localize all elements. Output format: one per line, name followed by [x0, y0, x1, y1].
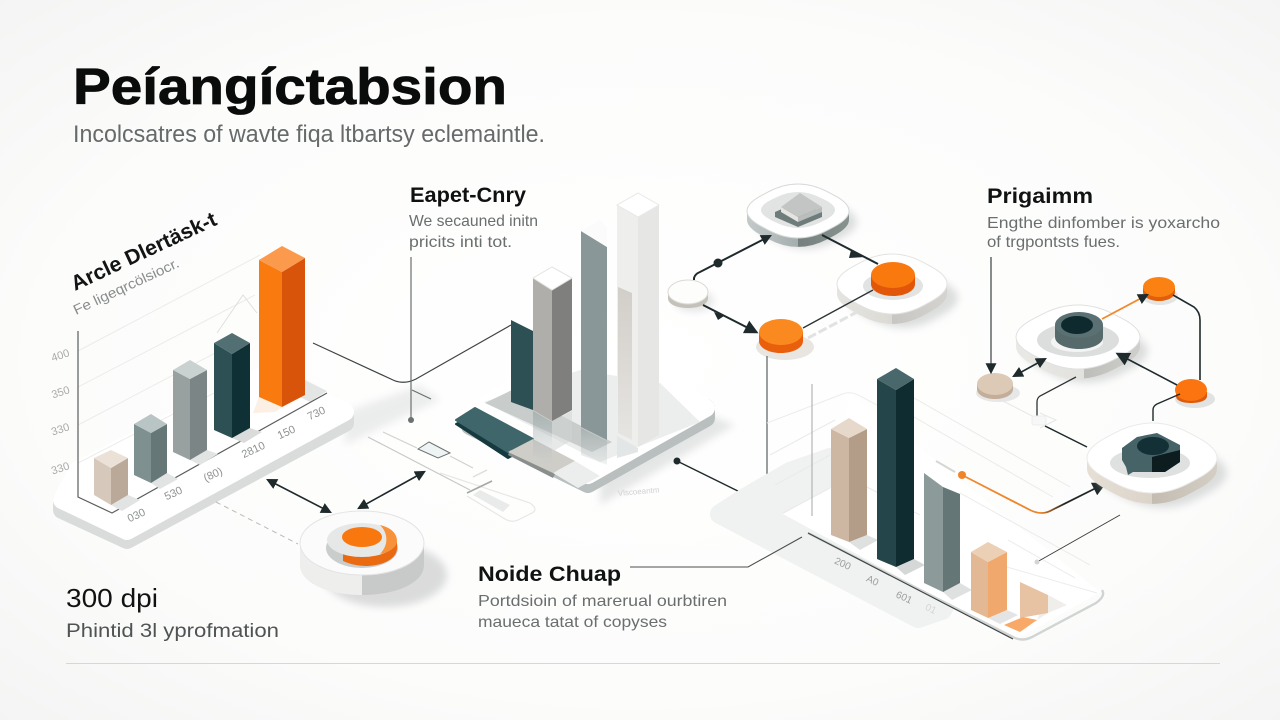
- panel: right network heading: Prigaimm: [987, 185, 1093, 208]
- double arrow: chart to disc left: [268, 480, 330, 512]
- right network text: of trgpontsts fues.: [987, 234, 1120, 251]
- title: Peíangíctabsion: [73, 58, 507, 115]
- legend block: teal: [456, 408, 533, 458]
- lower callout text: Portdsioin of marerual ourbtiren: [478, 593, 727, 610]
- x axis labels: 030: [126, 507, 147, 525]
- chart caption: Fe ligeqrcölsiocr.: [71, 255, 181, 318]
- node: orange disc centre: [756, 319, 814, 360]
- y axis: [811, 384, 813, 516]
- line: orange top to orange right: [1173, 295, 1200, 380]
- panel: lower bar chart: [720, 368, 1103, 640]
- leader line: centre callout: [408, 257, 431, 423]
- x axis labels: 601: [894, 590, 914, 607]
- x axis labels: [126, 405, 327, 525]
- connector: lower chart to platform: [1034, 515, 1120, 564]
- leader: heading to beige node: [990, 257, 992, 372]
- legend block: light: [553, 461, 600, 488]
- right network text: [987, 215, 1220, 251]
- x axis labels: 730: [306, 405, 327, 423]
- platform: centre base: [468, 345, 735, 505]
- leader: orange disc down: [766, 356, 768, 524]
- x axis labels: 200: [832, 556, 853, 573]
- blueprint strip: [368, 432, 535, 521]
- bar: peach: [971, 542, 1018, 624]
- chart axes: [78, 331, 327, 513]
- platform: left chart base: [62, 372, 345, 540]
- node: orange right: [1175, 379, 1215, 408]
- bar 3 grey: [173, 360, 218, 465]
- small junction: [1032, 416, 1046, 425]
- x axis labels: 01: [923, 602, 938, 617]
- node: dark icon platform: [1087, 423, 1227, 508]
- panel: centre 3D chart: [456, 193, 735, 505]
- subtitle: Incolcsatres of wavte fiqa ltbartsy eclemaintle.: [73, 121, 545, 148]
- node: small white disc: [668, 280, 714, 312]
- chart grid lines: [78, 255, 260, 463]
- node: beige: [976, 373, 1020, 402]
- y axis labels: 330: [50, 421, 71, 438]
- dashed line: [216, 502, 298, 544]
- print info label: Phintid 3l yprofmation: [66, 621, 279, 642]
- bar: warm grey: [533, 267, 572, 421]
- connector: orange disc to platform: [803, 290, 873, 338]
- bar 5 orange: [253, 246, 305, 413]
- double arrow: beige to ring: [1014, 359, 1045, 376]
- arrow: orange link: [1102, 295, 1147, 319]
- faint lines from beige node: [1003, 401, 1056, 428]
- bar reflections: [533, 411, 638, 465]
- shaded band between left and centre panels: [345, 385, 440, 445]
- y axis labels: 350: [50, 384, 71, 401]
- double arrow: chart to disc right: [359, 472, 424, 508]
- arrow: top node to orange platform: [822, 235, 878, 264]
- bar: small fading peach: [1004, 582, 1067, 632]
- centre callout text: [409, 213, 538, 251]
- bar 4 dark teal: [214, 333, 262, 443]
- panel: left bar chart: [50, 208, 345, 540]
- bar: grey tall: [581, 220, 607, 440]
- lower callout heading: Noide Chuap: [478, 563, 621, 586]
- centre callout heading: Eapet-Cnry: [410, 184, 526, 207]
- node: dark ring platform: [1016, 305, 1148, 383]
- caption under centre platform: Vlscoeantm: [617, 485, 660, 498]
- x axis labels: 530: [163, 485, 184, 503]
- node: orange top: [1142, 277, 1178, 305]
- y axis labels: 330: [50, 460, 71, 477]
- x axis labels: (80): [202, 465, 225, 485]
- lower callout text: maueca tatat of copyses: [478, 614, 667, 631]
- x axis labels: [832, 556, 938, 617]
- right network text: Engthe dinfomber is yoxarcho: [987, 215, 1220, 232]
- centre callout text: pricits inti tot.: [409, 234, 512, 251]
- connector: left chart to centre: [313, 325, 511, 382]
- print info value: 300 dpi: [66, 583, 158, 613]
- arrow head on that line: [849, 250, 865, 258]
- bar: dark teal: [877, 368, 925, 575]
- centre callout text: We secauned initn: [409, 213, 538, 230]
- bar: beige: [831, 418, 878, 550]
- arrow: orange right to ring: [1118, 354, 1177, 385]
- y axis labels: 400: [50, 347, 71, 364]
- arrow: white disc to orange disc: [703, 305, 756, 332]
- chart heading: Arcle Dlertäsk-t: [67, 208, 220, 296]
- orange connector to platform: [936, 461, 1104, 513]
- lower callout text: [478, 593, 727, 631]
- node: orange disc platform: [837, 254, 958, 328]
- chart grid lines: [770, 398, 1090, 578]
- arrow: white disc to top node: [694, 236, 770, 280]
- icon: orange disc: [300, 511, 447, 607]
- leader: lower callout: [630, 537, 802, 567]
- x axis labels: A0: [864, 574, 880, 589]
- x axis labels: 2810: [240, 440, 267, 461]
- bar: white tall: [617, 193, 659, 447]
- bar: dark teal back: [511, 320, 533, 410]
- line: platform to orange right: [1153, 394, 1180, 421]
- x axis labels: 150: [276, 424, 297, 442]
- y axis labels: [50, 347, 71, 477]
- connector with dot: [674, 458, 750, 497]
- platform: lower base: [720, 392, 1103, 640]
- legend block: grey: [508, 439, 575, 478]
- footer rule: [66, 662, 1220, 664]
- node: top grey box platform: [747, 184, 857, 249]
- bar: grey: [924, 473, 972, 600]
- bar 1 beige: [94, 450, 140, 511]
- line: ring down: [1037, 377, 1076, 416]
- line: junction to platform: [1045, 426, 1087, 447]
- bar 2 slate: [134, 414, 178, 489]
